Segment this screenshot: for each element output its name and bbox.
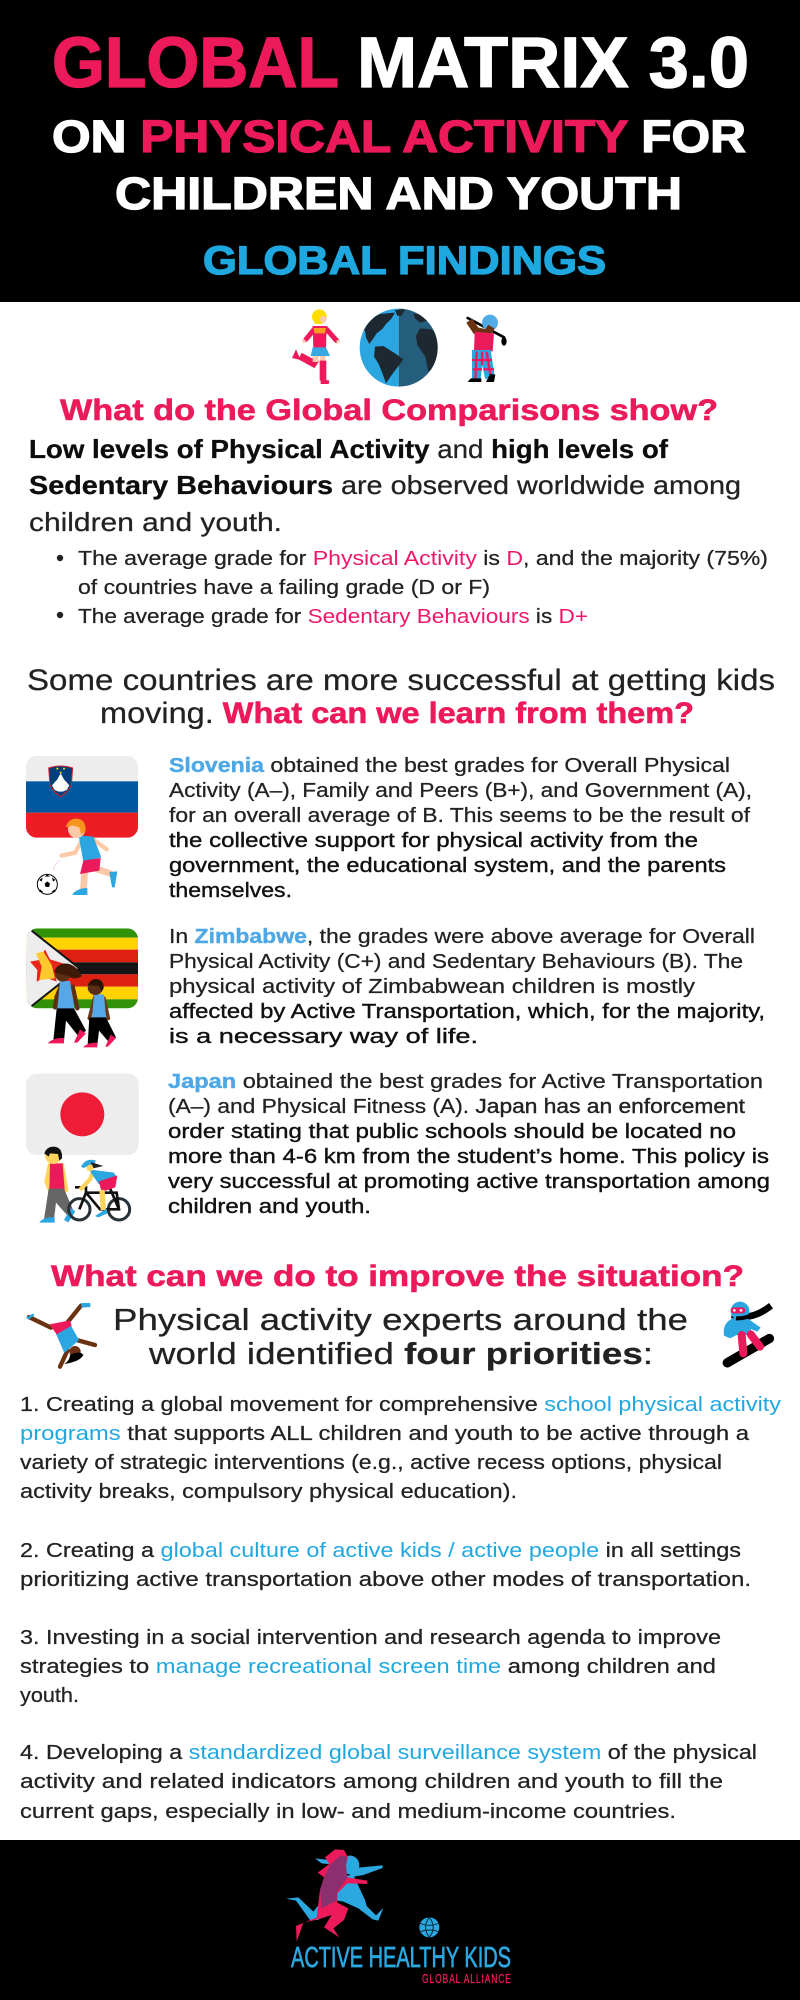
panel: Japan — [26, 1071, 770, 1223]
title line 1: GLOBAL — [52, 24, 339, 103]
heading: four priorities intro: world identified four priorities : — [148, 1336, 653, 1371]
panel: Slovenia — [26, 755, 752, 902]
text: Japan description — [168, 1071, 770, 1218]
text: Slovenia description: Activity (A–), Family and Peers (B+), and Government (A), — [169, 780, 752, 802]
text: Slovenia description: themselves. — [169, 880, 292, 902]
text: Japan description: Japan obtained the best grades for Active Transportation — [168, 1071, 763, 1093]
panel: Zimbabwe — [27, 926, 765, 1048]
text: Japan description: more than 4-6 km from the student’s home. This policy is — [168, 1146, 769, 1168]
priority 4: current gaps, especially in low- and medium-income countries. — [20, 1801, 676, 1823]
icon: Slovenian flag and football player — [26, 756, 138, 895]
icon: cartwheeling child — [26, 1303, 95, 1367]
text: Zimbabwe description: Physical Activity (C+) and Sedentary Behaviours (B). The — [169, 951, 743, 973]
list: four priorities — [20, 1394, 781, 1823]
logo: Active Healthy Kids Global Alliance — [286, 1849, 512, 1987]
text: Slovenia description: the collective support for physical activity from the — [169, 830, 698, 852]
icon: globe — [360, 308, 438, 387]
icon: golfer — [468, 315, 507, 382]
text: Slovenia description: Slovenia obtained the best grades for Overall Physical — [169, 755, 730, 777]
priority 2: 2. Creating a global culture of active kids / active people in all settings — [20, 1540, 741, 1562]
icon: snowboarder — [721, 1302, 776, 1369]
heading: what can we learn: Some countries are more successful at getting kids — [27, 664, 775, 697]
icon: Japanese flag, walker and cyclist — [26, 1074, 139, 1223]
priority 2: prioritizing active transportation above other modes of transportation. — [20, 1569, 751, 1591]
text block: low levels summary: Low levels of Physical Activity and high levels of — [29, 434, 668, 464]
priority 1: activity breaks, compulsory physical education). — [20, 1481, 517, 1503]
priority 3: youth. — [20, 1685, 79, 1707]
logo tagline: GLOBAL ALLIANCE — [422, 1972, 512, 1987]
text: Zimbabwe description — [169, 926, 765, 1048]
priority 3: strategies to manage recreational screen time among children and — [20, 1656, 716, 1678]
priority 4 — [20, 1742, 757, 1823]
text: Japan description: order stating that public schools should be located no — [168, 1121, 736, 1143]
priority 1 — [20, 1394, 781, 1503]
title line 3: CHILDREN AND YOUTH — [115, 168, 682, 219]
heading: what can we do: What can we do to improve the situation? — [51, 1260, 744, 1293]
icon: skater, globe and golfer — [292, 307, 507, 390]
title line 1: MATRIX 3.0 — [357, 24, 749, 103]
text: Japan description: children and youth. — [168, 1196, 371, 1218]
subtitle: GLOBAL FINDINGS — [203, 239, 606, 283]
bullet list: average grades — [57, 547, 768, 628]
text: Zimbabwe description: physical activity of Zimbabwean children is mostly — [169, 976, 695, 998]
priority 1: 1. Creating a global movement for comprehensive school physical activity — [20, 1394, 781, 1416]
heading: what do the global comparisons show: What do the Global Comparisons show? — [60, 394, 718, 427]
priority 3: 3. Investing in a social intervention and research agenda to improve — [20, 1627, 721, 1649]
text: Zimbabwe description: is a necessary way of life. — [169, 1026, 478, 1048]
bullet list: average grades: The average grade for Physical Activity is D, and the majority (75%) — [78, 547, 768, 570]
header band — [0, 0, 800, 302]
bullet list: average grades: The average grade for Sedentary Behaviours is D+ — [78, 605, 588, 628]
text: Zimbabwe description: In Zimbabwe , the grades were above average for Overall — [169, 926, 755, 948]
priority 3 — [20, 1627, 721, 1707]
logo figures — [286, 1849, 439, 1942]
footer band — [0, 1840, 800, 2000]
heading: what can we learn: moving. What can we learn from them? — [100, 697, 694, 730]
text: Slovenia description — [169, 755, 752, 902]
priority 4: 4. Developing a standardized global surveillance system of the physical — [20, 1742, 757, 1764]
bullet list: average grades: of countries have a failing grade (D or F) — [78, 576, 490, 599]
icon: Zimbabwean flag and walkers — [27, 928, 138, 1047]
title line 2: ON PHYSICAL ACTIVITY FOR — [52, 111, 746, 162]
text block: low levels summary — [29, 434, 741, 537]
text: Slovenia description: for an overall average of B. This seems to be the result of — [169, 805, 750, 827]
text: Zimbabwe description: affected by Active Transportation, which, for the majority, — [169, 1001, 765, 1023]
text block: low levels summary: Sedentary Behaviours are observed worldwide among — [29, 470, 741, 500]
logo wordmark: ACTIVE HEALTHY KIDS — [291, 1942, 511, 1974]
text: Japan description: very successful at promoting active transportation among — [168, 1171, 770, 1193]
priority 1: programs that supports ALL children and youth to be active through a — [20, 1423, 750, 1445]
heading: what can we learn — [27, 664, 775, 730]
priority 2 — [20, 1540, 751, 1591]
text block: low levels summary: children and youth. — [29, 507, 282, 537]
text: Slovenia description: government, the educational system, and the parents — [169, 855, 726, 877]
text: Japan description: (A–) and Physical Fitness (A). Japan has an enforcement — [168, 1096, 746, 1118]
icon: skater — [292, 309, 340, 384]
priority 4: activity and related indicators among children and youth to fill the — [20, 1771, 723, 1793]
priority 1: variety of strategic interventions (e.g., active recess options, physical — [20, 1452, 722, 1474]
heading: four priorities intro — [113, 1302, 688, 1371]
heading: four priorities intro: Physical activity experts around the — [113, 1302, 688, 1337]
